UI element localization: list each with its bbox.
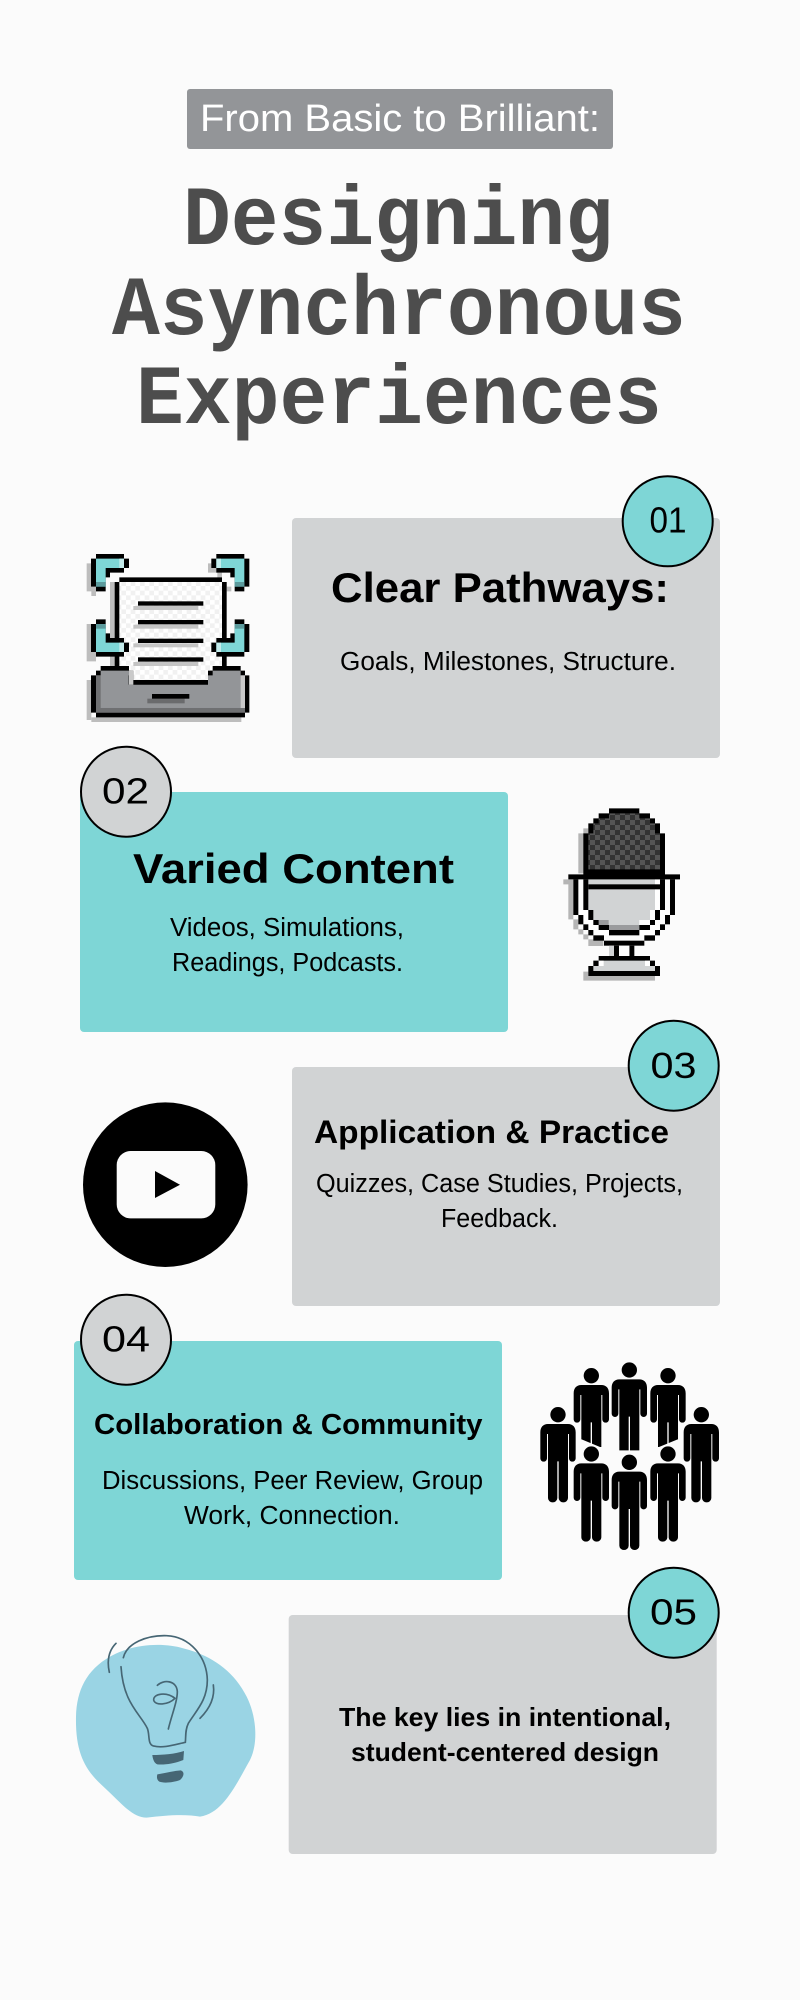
title: Experiences — [136, 354, 662, 449]
number badge 05: 05 — [650, 1592, 697, 1632]
panel: varied content — [80, 747, 508, 1032]
text: collaboration types: Discussions, Peer Review, Group — [102, 1467, 483, 1495]
heading: collaboration and community: Collaboration & Community — [94, 1409, 482, 1441]
mic arms and stand — [573, 879, 675, 976]
icon: group of people — [540, 1362, 719, 1550]
text: practice types — [316, 1170, 683, 1233]
mic head — [568, 808, 680, 879]
paper — [115, 577, 227, 666]
text: key takeaway: The key lies in intentional, — [339, 1702, 671, 1732]
icon: video play button — [83, 1102, 248, 1267]
heading: varied content: Varied Content — [133, 845, 454, 892]
heading: application and practice: Application & Practice — [314, 1114, 669, 1150]
bulb outline — [108, 1636, 214, 1747]
text: content types: Videos, Simulations, — [170, 914, 404, 942]
icon: microphone — [563, 808, 680, 981]
infographic canvas — [74, 89, 720, 1854]
white gap between arms and body — [578, 910, 670, 935]
text: collaboration types: Work, Connection. — [184, 1502, 400, 1530]
number badge 02 — [81, 747, 171, 837]
panel: collaboration and community — [74, 1295, 502, 1580]
text: content types — [170, 914, 404, 977]
icon: document tray — [87, 554, 249, 722]
text: key takeaway: student-centered design — [351, 1737, 659, 1767]
subtitle badge — [187, 89, 613, 149]
number badge 01 — [623, 476, 713, 566]
text: collaboration types — [102, 1467, 483, 1530]
text lines on paper — [133, 601, 203, 666]
text: key takeaway — [339, 1702, 671, 1767]
number badge 04 — [81, 1295, 171, 1385]
text: goals: Goals, Milestones, Structure. — [340, 648, 676, 676]
bulb base — [152, 1751, 184, 1783]
blob background — [76, 1645, 255, 1818]
text: practice types: Quizzes, Case Studies, Projects, — [316, 1170, 683, 1198]
number badge 01: 01 — [650, 500, 686, 540]
number badge 04: 04 — [102, 1318, 150, 1360]
heading: clear pathways: Clear Pathways: — [331, 564, 669, 611]
number badge 03: 03 — [650, 1045, 696, 1086]
mic shadow — [563, 828, 655, 981]
panel: application and practice — [292, 1021, 720, 1306]
number badge 03 — [629, 1021, 719, 1111]
tray — [91, 666, 249, 717]
icon shadows — [87, 563, 241, 722]
number badge 05 — [629, 1568, 719, 1658]
text: content types: Readings, Podcasts. — [172, 949, 403, 977]
subtitle badge: From Basic to Brilliant: — [200, 98, 600, 140]
icon: light bulb — [76, 1636, 255, 1818]
title: Asynchronous — [112, 265, 686, 360]
panel: key takeaway — [289, 1568, 719, 1854]
panel: clear pathways — [292, 476, 720, 758]
title: Designing — [183, 175, 613, 270]
text: practice types: Feedback. — [441, 1205, 558, 1233]
corner brackets — [91, 554, 249, 657]
mic body — [588, 874, 660, 930]
mic body outline — [583, 879, 665, 935]
title — [112, 175, 686, 449]
number badge 02: 02 — [102, 770, 149, 812]
